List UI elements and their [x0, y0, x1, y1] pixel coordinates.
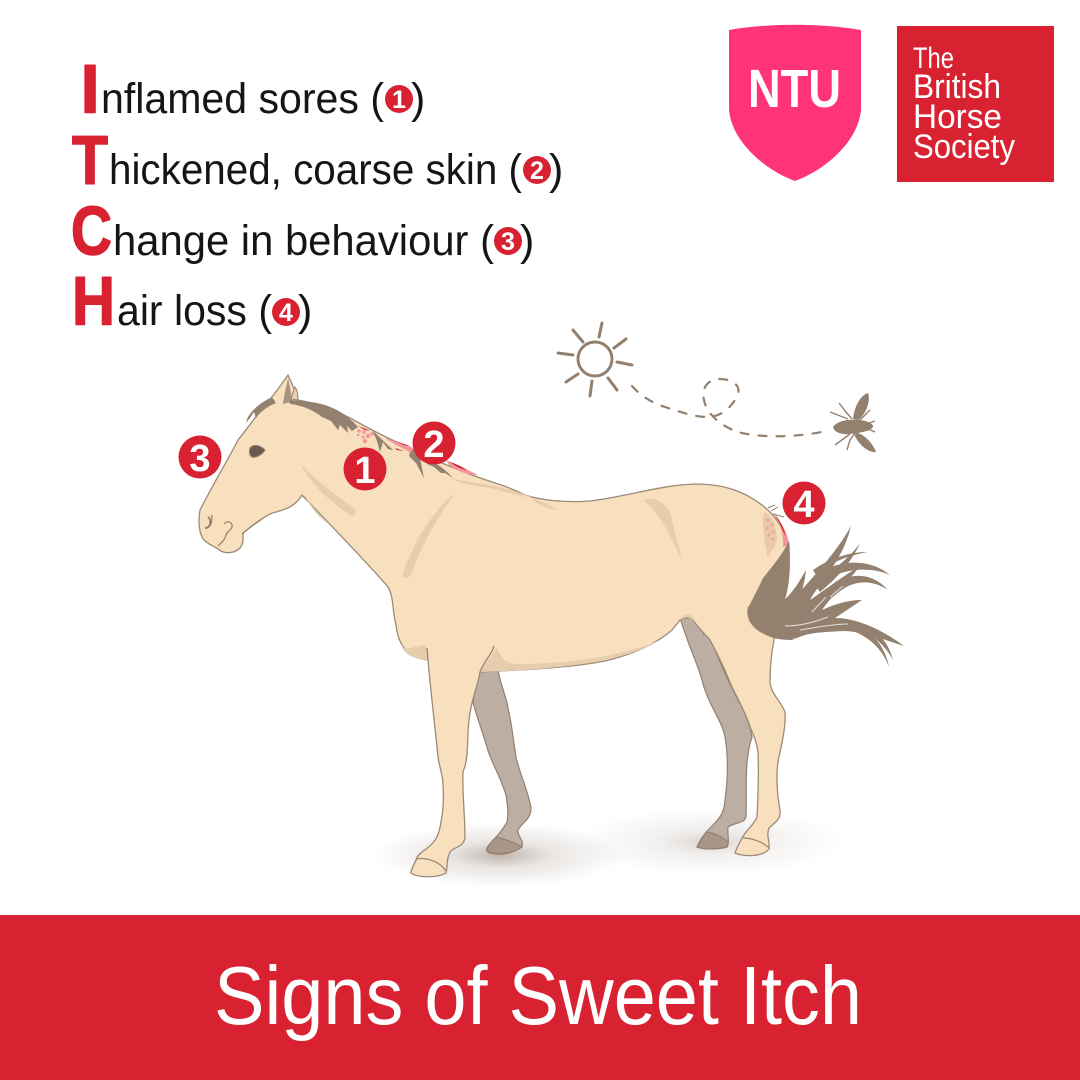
line: Change in behaviour: )	[520, 217, 534, 265]
line: Hair loss	[72, 262, 312, 340]
arrow: dashed flight path	[632, 379, 826, 436]
line: Change in behaviour: 3	[501, 228, 515, 256]
line: Inflamed sores: I	[80, 50, 100, 128]
logo: The British Horse Society: Society	[913, 128, 1015, 166]
horse illustration	[199, 375, 904, 877]
tail upper strands	[797, 526, 851, 598]
line: Inflamed sores	[80, 50, 425, 128]
logo: NTU shield: NTU	[748, 59, 841, 119]
line: Change in behaviour: C	[71, 192, 112, 270]
tail lower strands	[850, 624, 889, 667]
callout 2: 2	[423, 424, 445, 466]
callout 4	[782, 482, 826, 526]
line: Thickened, coarse skin: hickened, coarse skin (	[109, 146, 523, 194]
line: Thickened, coarse skin: )	[549, 146, 563, 194]
line: Hair loss: 4	[279, 299, 293, 327]
line: Hair loss: )	[298, 287, 312, 335]
callout 2	[412, 422, 456, 466]
far front leg	[473, 665, 531, 854]
logo: The British Horse Society	[897, 26, 1054, 182]
logo: The British Horse Society: Horse	[913, 98, 1002, 136]
far hind leg	[680, 618, 752, 849]
near ear inner	[283, 378, 292, 404]
ITCH mnemonic list	[71, 50, 563, 340]
tail mass	[748, 541, 904, 646]
inflamed sores on crest	[357, 426, 478, 475]
line: Inflamed sores: 1	[392, 86, 406, 114]
line: Hair loss: air loss (	[117, 287, 273, 335]
line: Hair loss: H	[72, 262, 115, 340]
hair loss patch on dock	[763, 505, 789, 558]
horse body	[199, 375, 789, 877]
line: Thickened, coarse skin: 2	[530, 157, 544, 185]
mane	[246, 397, 453, 478]
logo: The British Horse Society: British	[913, 68, 1001, 106]
eye	[249, 445, 265, 457]
title banner: Signs of Sweet Itch	[214, 949, 862, 1042]
line: Thickened, coarse skin: T	[72, 122, 108, 198]
line: Inflamed sores: nflamed sores (	[101, 75, 385, 123]
icon: midge	[830, 393, 876, 452]
line: Change in behaviour	[71, 192, 534, 270]
far front hoof	[487, 837, 522, 854]
line: Thickened, coarse skin	[72, 122, 563, 198]
far hind hoof	[697, 832, 728, 849]
line: Inflamed sores: )	[411, 75, 425, 123]
tail left strands	[702, 576, 768, 636]
title banner	[0, 915, 1080, 1080]
tail	[747, 526, 904, 667]
line: Change in behaviour: hange in behaviour (	[113, 217, 495, 265]
logo: The British Horse Society: The	[913, 42, 954, 75]
icon: sun	[558, 323, 632, 396]
front leg lines and hooves	[416, 646, 769, 871]
far ear	[291, 387, 298, 400]
callout 4: 4	[793, 484, 815, 526]
logo: NTU shield	[729, 25, 861, 181]
hair highlights	[785, 586, 848, 630]
nostril and mouth	[205, 516, 262, 546]
callout 3: 3	[189, 438, 211, 480]
callout 1: 1	[354, 450, 376, 492]
horse shadow	[375, 808, 845, 887]
callout 1	[344, 448, 386, 492]
callout 3	[178, 436, 222, 480]
body muscle shading	[300, 463, 697, 672]
